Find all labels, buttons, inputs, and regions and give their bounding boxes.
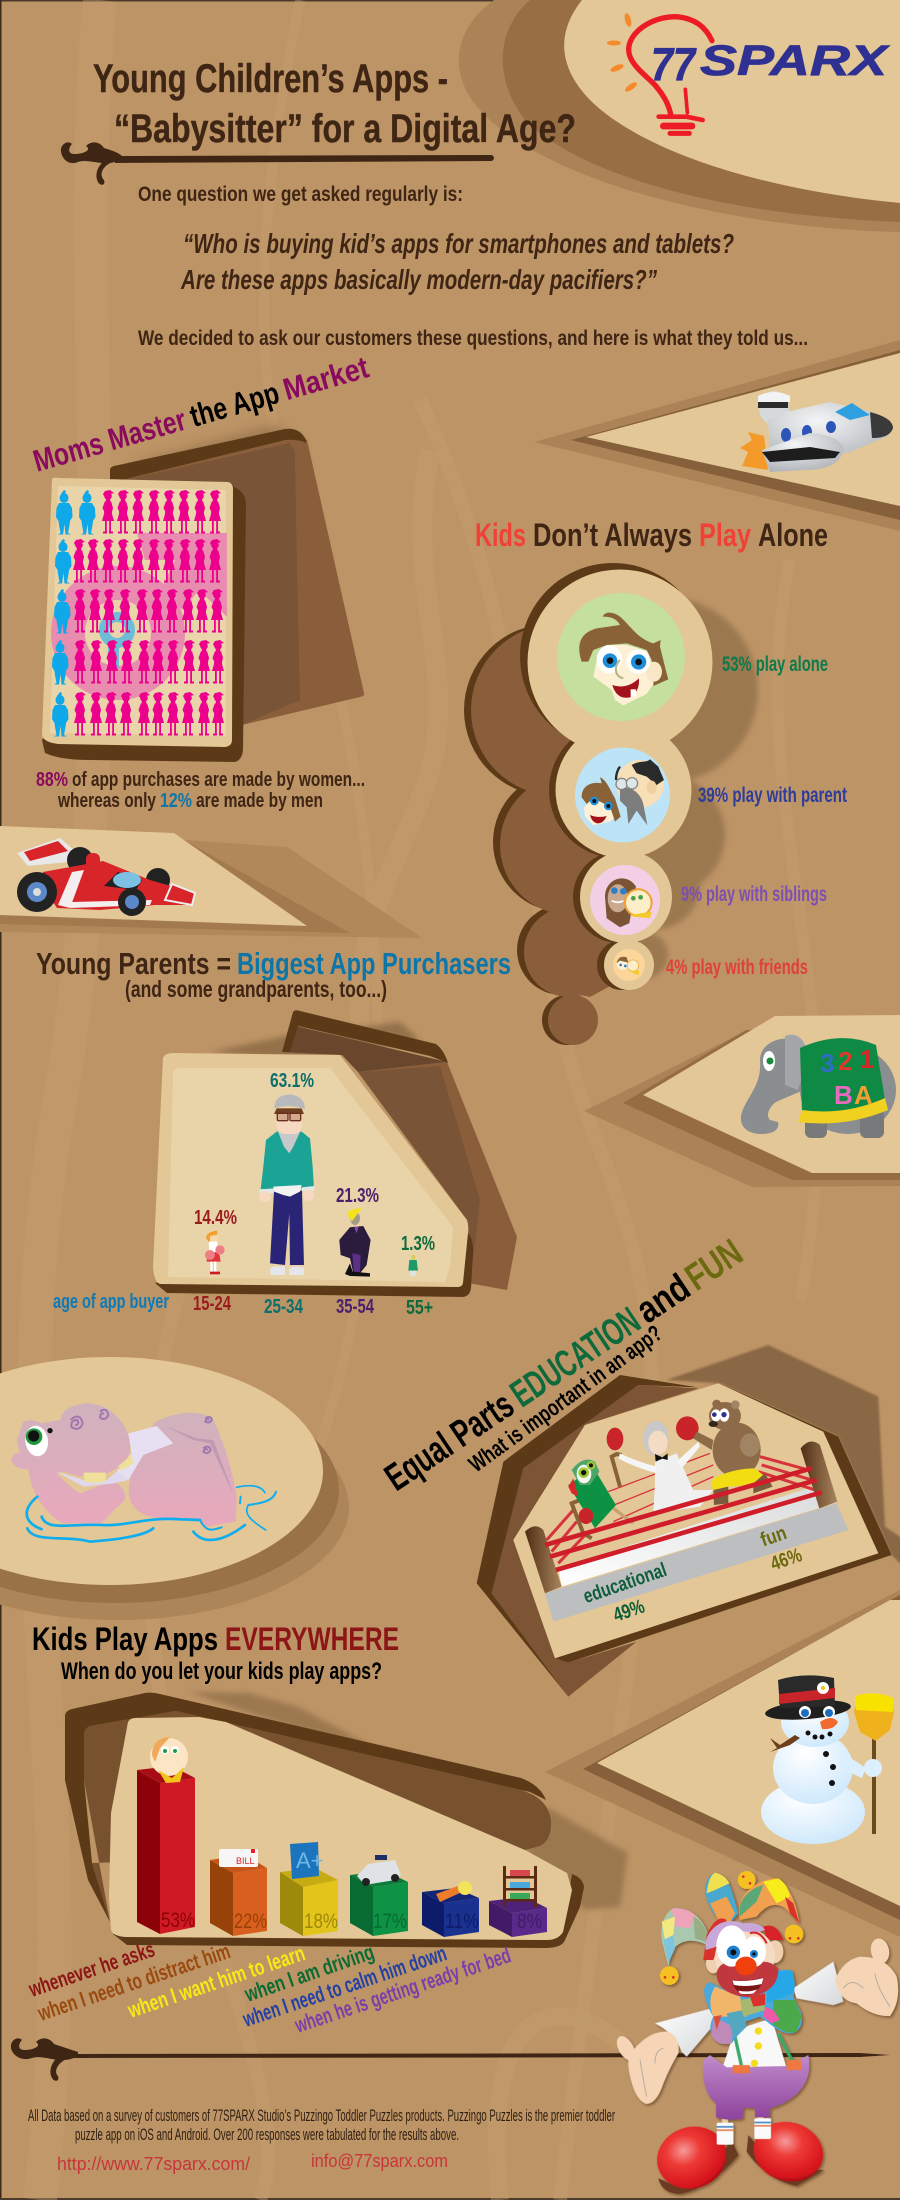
labels: play with whom: 39% play with parent bbox=[698, 784, 847, 807]
clown shirt bbox=[722, 2018, 787, 2070]
clown shoes bbox=[649, 2114, 830, 2198]
panel: hippo bbox=[0, 1357, 349, 1620]
title bbox=[93, 57, 576, 151]
intro text: One question we get asked regularly is: bbox=[138, 183, 463, 206]
icon: elephant: 3 bbox=[820, 1048, 834, 1078]
labels: education and fun: 49% bbox=[610, 1596, 648, 1627]
panel wall bbox=[84, 1711, 551, 1922]
heading: moms master: Moms Master bbox=[29, 402, 190, 479]
panel shadow bbox=[210, 1022, 420, 1060]
bubble: play with friends bbox=[613, 949, 645, 981]
icon: water bbox=[27, 1486, 276, 1542]
clown face bbox=[703, 1918, 783, 1997]
axis labels: age: age of app buyer bbox=[53, 1291, 169, 1313]
heading: kids don't always play alone bbox=[475, 517, 828, 553]
logo panel bbox=[459, 0, 900, 232]
logo wordmark: SPARX bbox=[700, 37, 890, 85]
heading: kids play apps everywhere: When do you let your kids play apps? bbox=[61, 1658, 382, 1685]
character: jester clown bbox=[613, 1871, 898, 2198]
clown suspenders bbox=[733, 2027, 801, 2073]
panel: bar chart bbox=[65, 1692, 628, 1948]
heading: kids play apps everywhere: Kids Play Apps bbox=[32, 1621, 218, 1657]
values: age percentages: 14.4% bbox=[194, 1207, 237, 1229]
icon: hippo bbox=[12, 1403, 237, 1527]
clown legs bbox=[717, 2115, 771, 2145]
heading: equal parts: FUN bbox=[678, 1232, 750, 1299]
panel: spaceship bbox=[534, 340, 900, 531]
heading: equal parts: EDUCATION bbox=[503, 1300, 648, 1416]
caption: purchase share: 88% bbox=[36, 769, 68, 791]
pictogram: women bbox=[73, 490, 224, 736]
bubble: play with parent bbox=[575, 748, 670, 842]
values: age percentages bbox=[194, 1070, 435, 1255]
intro text bbox=[138, 183, 808, 350]
heading: equal parts: Equal Parts bbox=[378, 1384, 522, 1499]
bar: calm bbox=[422, 1881, 479, 1937]
bar: learn bbox=[280, 1842, 338, 1936]
labels: when kids play: whenever he asks bbox=[25, 1936, 158, 2002]
figure: small 55+ bbox=[408, 1255, 418, 1276]
heading: young parents: Biggest App Purchasers bbox=[237, 946, 511, 981]
watermark: gender symbols bbox=[68, 533, 227, 683]
icon: elephant: B bbox=[834, 1080, 853, 1110]
shadow behind bubbles bbox=[572, 597, 758, 978]
bar: whenever he asks: 53% bbox=[161, 1909, 195, 1932]
heading: kids don't always play alone: Kids bbox=[475, 517, 526, 553]
bar: bed bbox=[489, 1866, 547, 1937]
clown puzzle collar bbox=[704, 1970, 802, 2044]
values: age percentages: 21.3% bbox=[336, 1185, 379, 1207]
icon: elephant: 1 bbox=[860, 1044, 874, 1074]
axis labels: age bbox=[53, 1291, 433, 1319]
heading: kids don't always play alone: Don’t Always bbox=[533, 517, 692, 553]
footer text: http://www.77sparx.com/ bbox=[57, 2154, 250, 2174]
panel back wall bbox=[282, 1010, 517, 1290]
caption: purchase share: whereas only bbox=[57, 790, 157, 812]
flourish divider bbox=[61, 142, 494, 185]
brown blob bbox=[464, 624, 643, 1045]
icon: elephant: 2 bbox=[838, 1046, 852, 1076]
panel: race car bbox=[0, 826, 422, 938]
logo wordmark bbox=[651, 37, 890, 90]
icon: toy shelf bbox=[503, 1866, 537, 1907]
jester hat bbox=[660, 1871, 803, 1985]
icon: snowman bbox=[761, 1675, 894, 1844]
icon: bill: BILL bbox=[236, 1856, 255, 1866]
footer text: info@77sparx.com bbox=[311, 2151, 448, 2171]
heading: kids play apps everywhere bbox=[32, 1621, 399, 1685]
heading: kids don't always play alone: Play bbox=[699, 517, 751, 553]
labels: education and fun: 46% bbox=[768, 1544, 805, 1575]
title: Young Children’s Apps - bbox=[93, 57, 448, 101]
ring panel wall bbox=[477, 1375, 892, 1697]
ring posts bbox=[525, 1442, 837, 1593]
icon: book: A+ bbox=[296, 1848, 324, 1873]
heading: equal parts bbox=[378, 1232, 750, 1499]
heading: moms master bbox=[29, 349, 372, 479]
icon: toy trumpet bbox=[436, 1881, 472, 1902]
heading: young parents: Young Parents = bbox=[36, 946, 231, 981]
clown arms bbox=[655, 1962, 843, 2057]
axis labels: age: 25-34 bbox=[264, 1296, 304, 1318]
ring back ropes bbox=[547, 1453, 815, 1563]
icon: elephant: A bbox=[854, 1080, 873, 1110]
heading: young parents: (and some grandparents, too...) bbox=[125, 976, 387, 1002]
flourish divider: footer bbox=[11, 2038, 890, 2081]
character: referee bbox=[618, 1416, 713, 1512]
panel front bbox=[42, 483, 246, 762]
axis labels: age: 35-54 bbox=[336, 1296, 375, 1318]
heading: moms master: Market bbox=[279, 349, 372, 407]
bar: driving: 17% bbox=[373, 1910, 407, 1933]
bar: driving bbox=[350, 1855, 408, 1936]
icon: toy car bbox=[357, 1855, 401, 1886]
figure: girl 15-24 bbox=[205, 1231, 225, 1274]
bar: distract bbox=[210, 1849, 267, 1936]
clown pants bbox=[703, 2055, 809, 2120]
bar: calm: 11% bbox=[445, 1910, 479, 1933]
labels: play with whom: 9% play with siblings bbox=[681, 883, 827, 906]
bubble: play with siblings bbox=[590, 865, 660, 935]
icon: race car bbox=[17, 838, 195, 916]
labels: play with whom bbox=[666, 653, 847, 979]
labels: when kids play: when I am driving bbox=[241, 1939, 377, 2007]
labels: when kids play bbox=[25, 1936, 514, 2038]
labels: when kids play: when I need to distract him bbox=[34, 1938, 233, 2026]
axis labels: age: 55+ bbox=[406, 1297, 433, 1319]
panel: age chart bbox=[153, 1010, 517, 1297]
labels: education and fun bbox=[580, 1522, 805, 1627]
caption: purchase share: are made by men bbox=[196, 790, 323, 812]
bar: bed: 8% bbox=[517, 1910, 542, 1933]
icon: sparks bbox=[607, 12, 638, 93]
panel shadow bbox=[188, 1692, 628, 1910]
panel: snowman bbox=[545, 1590, 900, 1937]
character: frog boxer bbox=[568, 1428, 633, 1538]
title: “Babysitter” for a Digital Age? bbox=[114, 107, 576, 151]
bubble: play alone bbox=[557, 593, 685, 721]
chart: play with whom bubbles bbox=[464, 563, 758, 1045]
labels: play with whom: 53% play alone bbox=[722, 653, 828, 676]
logo wordmark: 77 bbox=[651, 38, 697, 90]
labels: when kids play: when he is getting ready for bed bbox=[291, 1942, 514, 2038]
figure: teen 25-34 bbox=[259, 1094, 315, 1275]
footer text: puzzle app on iOS and Android. Over 200 responses were tabulated for the results above. bbox=[75, 2125, 459, 2144]
heading: equal parts: and bbox=[629, 1266, 698, 1332]
values: age percentages: 1.3% bbox=[401, 1233, 435, 1255]
panel: elephant bbox=[584, 1015, 900, 1187]
subheading: what is important: What is important in an app? bbox=[464, 1320, 667, 1477]
footer text bbox=[28, 2106, 615, 2174]
bar: distract: 22% bbox=[234, 1910, 267, 1933]
labels: education and fun: fun bbox=[758, 1522, 790, 1551]
ring floor bbox=[558, 1487, 837, 1587]
ring panel shadow bbox=[667, 1345, 900, 1573]
icon: light bulb bbox=[629, 17, 712, 133]
heading: kids play apps everywhere: EVERYWHERE bbox=[225, 1621, 399, 1657]
caption: purchase share: 12% bbox=[160, 790, 192, 812]
figure: suit man 35-54 bbox=[339, 1208, 371, 1277]
panel: boxing ring bbox=[477, 1345, 900, 1697]
ring front ropes bbox=[545, 1468, 822, 1570]
labels: when kids play: when I want him to learn bbox=[124, 1940, 308, 2023]
character: bear boxer bbox=[693, 1400, 773, 1505]
icon: elephant bbox=[741, 1035, 896, 1138]
icon: spaceship bbox=[740, 391, 893, 472]
pictogram: men bbox=[52, 490, 96, 736]
axis labels: age: 15-24 bbox=[193, 1293, 232, 1315]
clown hands bbox=[613, 1937, 898, 2104]
labels: play with whom: 4% play with friends bbox=[666, 956, 808, 979]
panel: moms pictogram bbox=[42, 425, 364, 762]
intro text: Are these apps basically modern-day pacifiers?” bbox=[180, 264, 657, 295]
panel back wall bbox=[110, 425, 364, 725]
logo bbox=[607, 12, 890, 133]
heading: kids don't always play alone: Alone bbox=[758, 517, 828, 553]
heading: moms master: the App bbox=[186, 375, 283, 434]
caption: purchase share bbox=[36, 769, 365, 812]
bar: learn: 18% bbox=[304, 1910, 338, 1933]
heading: young parents bbox=[36, 946, 511, 1002]
bar: whenever he asks bbox=[137, 1737, 195, 1934]
labels: when kids play: when I need to calm him down bbox=[239, 1940, 450, 2032]
labels: education and fun: educational bbox=[580, 1559, 670, 1608]
caption: purchase share: of app purchases are made by women... bbox=[72, 769, 365, 791]
icon: baby head bbox=[150, 1737, 188, 1783]
values: age percentages: 63.1% bbox=[270, 1070, 314, 1092]
